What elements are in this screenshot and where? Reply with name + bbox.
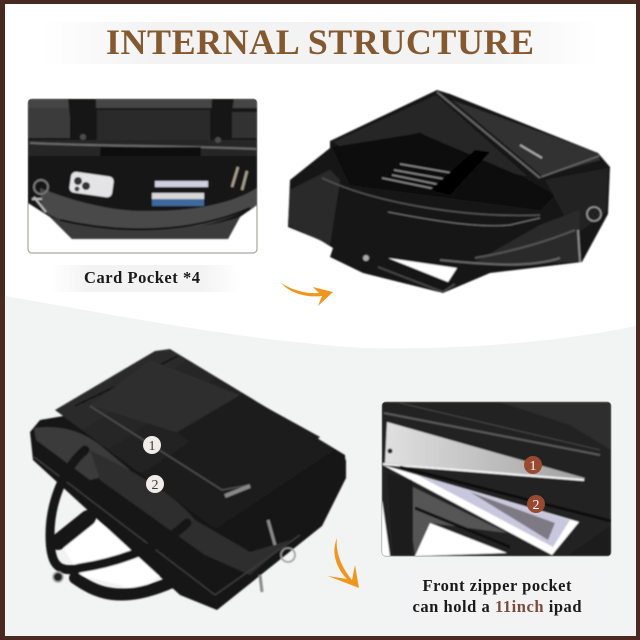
top bag handle	[363, 255, 457, 292]
arrow: orange to lower bag	[328, 538, 359, 588]
white background below bag	[382, 500, 507, 556]
badge 1	[524, 456, 542, 474]
side ring	[578, 207, 601, 262]
cards	[152, 181, 208, 206]
phone	[69, 171, 114, 198]
pocket tablet with photo	[383, 465, 579, 555]
handle	[50, 450, 187, 595]
handle	[410, 479, 412, 482]
ipad	[383, 422, 585, 480]
front flap	[55, 349, 346, 544]
zipper pull	[225, 486, 250, 496]
badge 1: 1	[148, 439, 156, 454]
caption: front zipper pocket: can hold a 11inch ipad	[412, 597, 582, 616]
keyring	[32, 180, 48, 212]
badge 2: 2	[532, 498, 540, 513]
panel: card pocket photo	[28, 99, 257, 253]
grey lower background curve	[5, 296, 636, 636]
arrow: orange to upper bag	[281, 283, 333, 306]
zipper pulls	[232, 167, 247, 190]
bag body	[30, 408, 346, 610]
front flap of pocket	[40, 188, 257, 231]
panel: zipper pocket photo	[382, 402, 611, 556]
badge 1: 1	[530, 459, 536, 474]
badge 2: 2	[152, 478, 158, 493]
label: card pocket: Card Pocket *4	[84, 268, 200, 287]
white window behind handle	[63, 517, 175, 590]
badge 2	[146, 475, 164, 493]
badge 2	[527, 495, 545, 513]
open bag photo	[288, 90, 610, 293]
badge 1	[143, 436, 161, 454]
caption: front zipper pocket: Front zipper pocket	[422, 576, 572, 595]
caption: front zipper pocket	[385, 570, 620, 625]
label: card pocket	[50, 265, 240, 292]
title: INTERNAL STRUCTURE	[106, 22, 534, 62]
closed bag photo	[30, 349, 346, 610]
